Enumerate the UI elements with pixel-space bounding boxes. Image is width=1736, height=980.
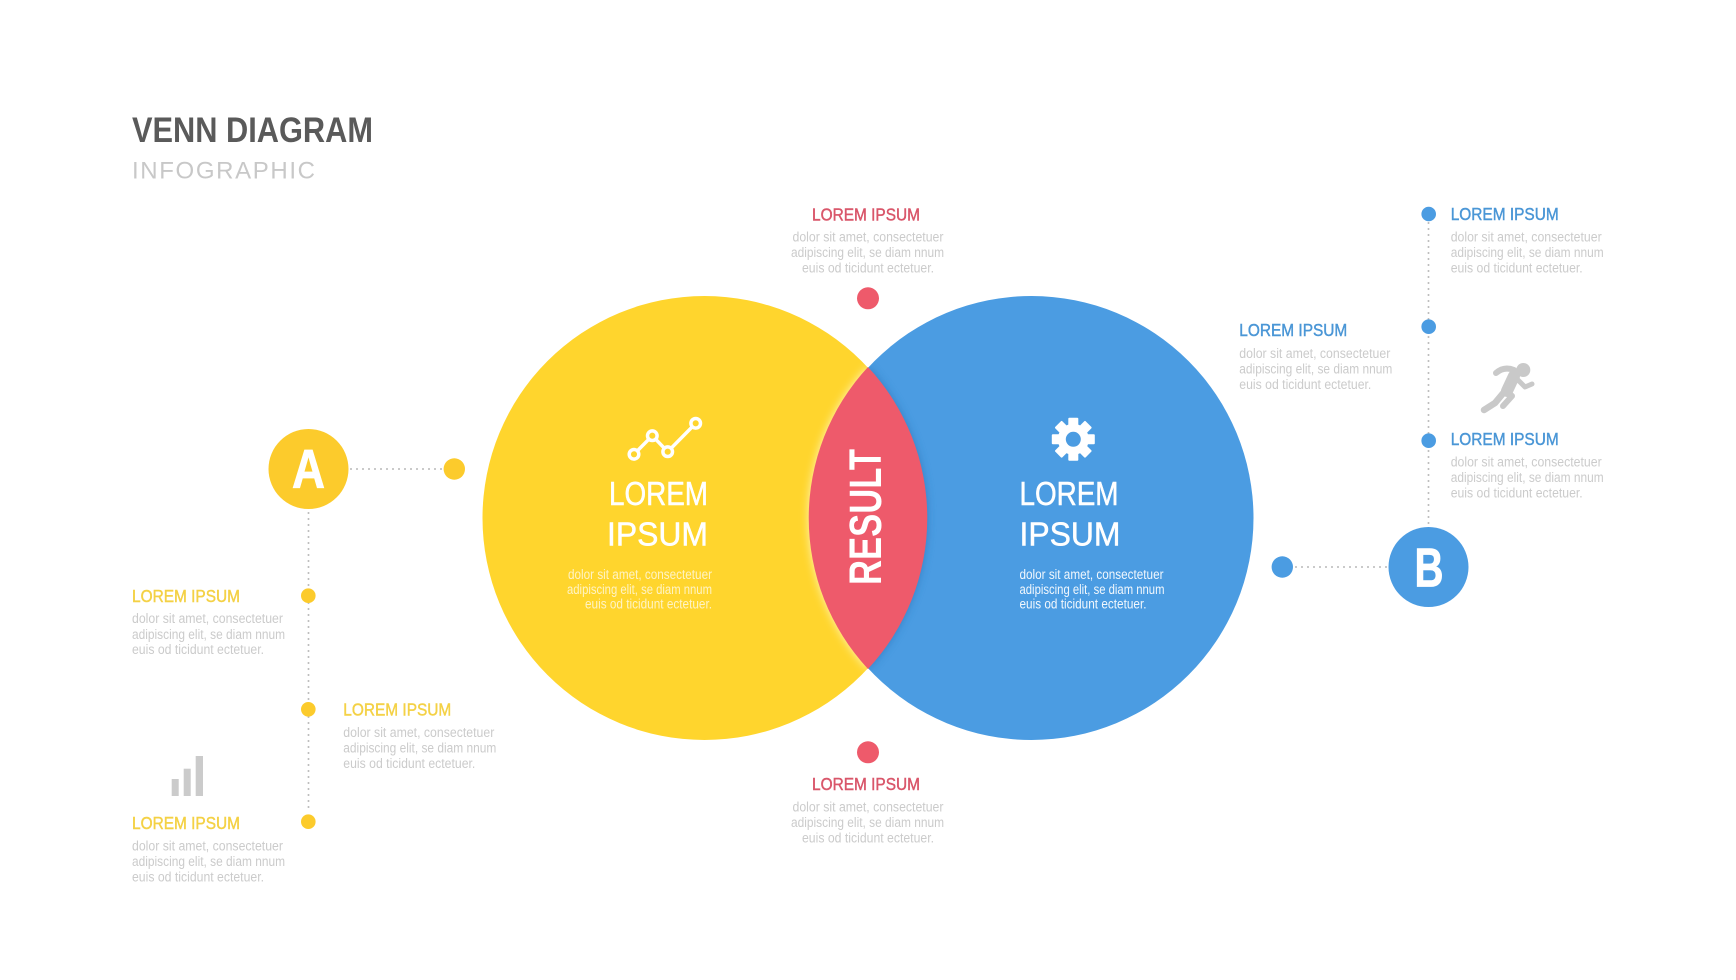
result callout: top: adipiscing elit, se diam nnum	[791, 245, 944, 260]
result callout: bottom: euis od ticidunt ectetuer.	[802, 830, 934, 846]
circle A: yellow	[482, 296, 926, 740]
badge B: B	[1414, 537, 1444, 599]
badge B	[1388, 527, 1468, 607]
timeline A	[268, 429, 465, 829]
text block: circle A: euis od ticidunt ectetuer.	[585, 596, 712, 612]
text block: circle A: adipiscing elit, se diam nnum	[567, 582, 712, 597]
venn diagram	[482, 296, 1254, 740]
text block: circle A: IPSUM	[607, 516, 708, 552]
item B3	[1451, 429, 1604, 500]
item B3: dolor sit amet, consectetuer	[1451, 454, 1602, 470]
item A3: dolor sit amet, consectetuer	[132, 838, 283, 854]
item A2: LOREM IPSUM	[343, 700, 451, 720]
item A1: euis od ticidunt ectetuer.	[132, 642, 264, 657]
text block: circle B	[1020, 475, 1164, 612]
item A2: euis od ticidunt ectetuer.	[343, 756, 475, 771]
item A3	[132, 813, 285, 884]
item A1: adipiscing elit, se diam nnum	[132, 627, 285, 642]
text block: circle A: dolor sit amet, consectetuer	[568, 567, 712, 582]
item B2	[1239, 320, 1392, 392]
item A2: adipiscing elit, se diam nnum	[343, 740, 496, 756]
item B1: LOREM IPSUM	[1451, 204, 1559, 224]
item B3: LOREM IPSUM	[1451, 429, 1559, 449]
subtitle: INFOGRAPHIC	[132, 158, 315, 184]
icon: line chart	[629, 418, 700, 459]
item B3: adipiscing elit, se diam nnum	[1451, 470, 1604, 485]
icon: bar chart	[172, 756, 203, 796]
result callout: bottom	[791, 741, 944, 846]
text block: circle B: dolor sit amet, consectetuer	[1020, 567, 1164, 582]
item A3: adipiscing elit, se diam nnum	[132, 854, 285, 869]
result label: RESULT	[840, 449, 891, 585]
circle B: blue	[810, 296, 1254, 740]
icon: gear	[1052, 418, 1095, 461]
text block: circle B: IPSUM	[1020, 516, 1120, 552]
item A3: euis od ticidunt ectetuer.	[132, 870, 264, 884]
result callout: top: euis od ticidunt ectetuer.	[802, 260, 934, 276]
text block: circle A	[567, 475, 712, 612]
result callout: bottom: adipiscing elit, se diam nnum	[791, 815, 944, 830]
result callout: bottom: LOREM IPSUM	[812, 774, 920, 794]
timeline B	[1272, 207, 1468, 607]
overlap lens: red	[809, 367, 927, 669]
item B1: dolor sit amet, consectetuer	[1451, 230, 1602, 244]
item A1	[132, 586, 285, 657]
icon: runner	[1484, 363, 1532, 410]
badge A: A	[292, 438, 325, 500]
result callout: bottom: dolor sit amet, consectetuer	[792, 800, 944, 814]
item B2: euis od ticidunt ectetuer.	[1239, 377, 1371, 392]
item B3: euis od ticidunt ectetuer.	[1451, 486, 1583, 500]
text block: circle A: LOREM	[609, 475, 708, 512]
item B1: adipiscing elit, se diam nnum	[1451, 245, 1604, 260]
item B1	[1451, 204, 1604, 276]
title	[132, 110, 373, 184]
item A1: dolor sit amet, consectetuer	[132, 611, 283, 626]
item A2	[343, 700, 496, 771]
item B2: LOREM IPSUM	[1239, 320, 1347, 340]
text block: circle B: euis od ticidunt ectetuer.	[1020, 596, 1146, 612]
item B2: dolor sit amet, consectetuer	[1239, 346, 1391, 361]
result callout: top	[791, 204, 944, 309]
text block: circle B: LOREM	[1020, 475, 1118, 512]
item B1: euis od ticidunt ectetuer.	[1451, 260, 1583, 276]
text block: circle B: adipiscing elit, se diam nnum	[1020, 582, 1164, 597]
item A2: dolor sit amet, consectetuer	[343, 725, 495, 740]
item A3: LOREM IPSUM	[132, 813, 240, 833]
item A1: LOREM IPSUM	[132, 586, 240, 606]
item B2: adipiscing elit, se diam nnum	[1239, 362, 1392, 376]
result callout: top: LOREM IPSUM	[812, 204, 920, 224]
badge A	[268, 429, 348, 509]
result callout: top: dolor sit amet, consectetuer	[792, 230, 944, 244]
title: VENN DIAGRAM	[132, 110, 373, 150]
